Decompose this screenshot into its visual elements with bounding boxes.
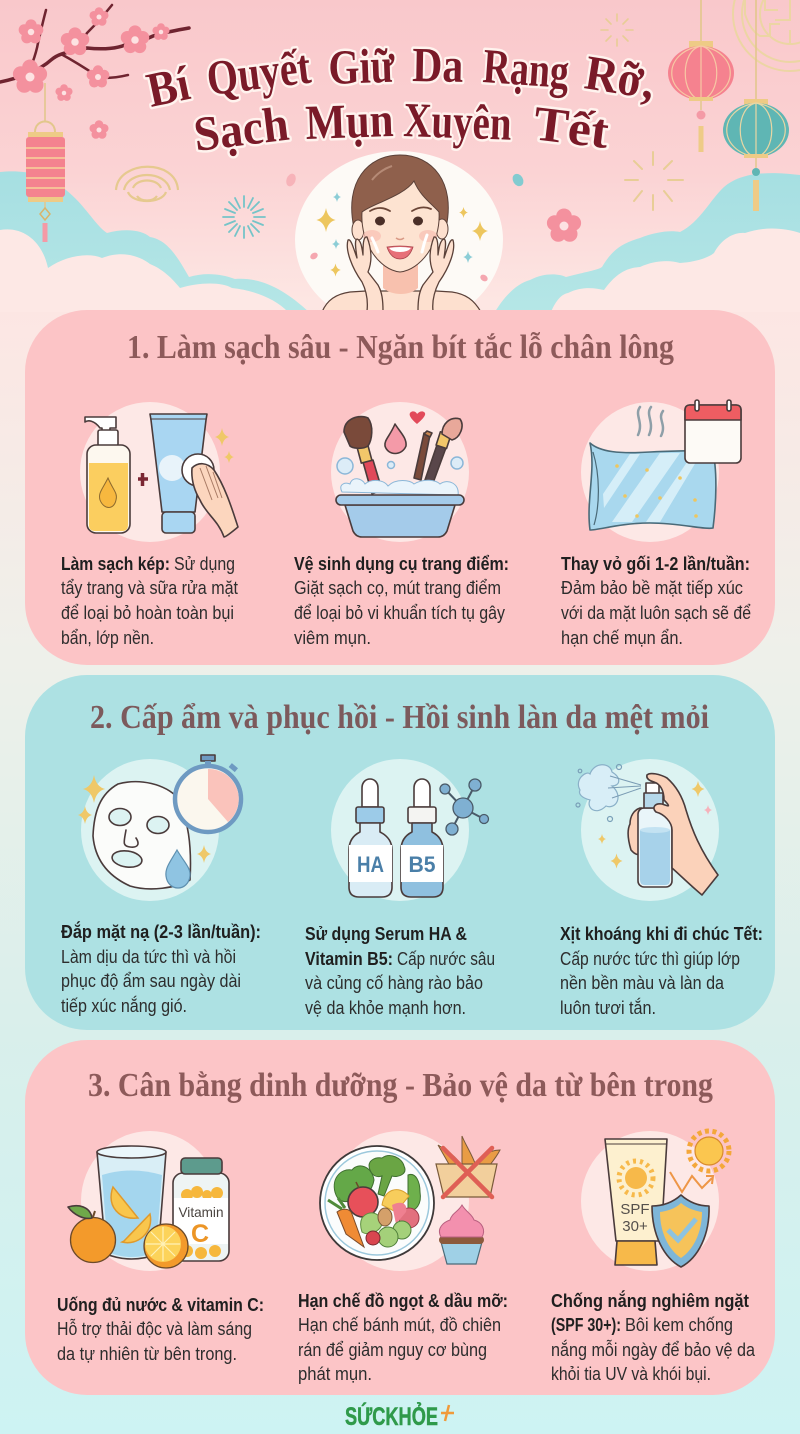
text: makeup tool hygiene: để loại bỏ vi khuẩn tích tụ gây: [294, 603, 505, 623]
teal clouds right: [495, 173, 800, 312]
heading 1: 1. Làm sạch sâu - Ngăn bít tắc lỗ chân lông: [127, 329, 674, 366]
left lantern: [26, 83, 65, 242]
text: serum: và củng cố hàng rào bảo: [305, 973, 483, 993]
cheeks: [363, 230, 437, 242]
text: serum: Cấp nước sâu: [397, 949, 495, 969]
text: sun protection: nắng mỗi ngày để bảo vệ da: [551, 1339, 756, 1360]
hair back: [352, 155, 448, 228]
smile: [387, 246, 413, 259]
icon: water, orange, vitamin C: C: [191, 1220, 209, 1248]
top gold firework: [601, 14, 633, 46]
text: double cleansing: tẩy trang và sữa rửa mặt: [61, 578, 238, 598]
title: Xuyên: [403, 92, 512, 151]
gold wave motif: [116, 167, 178, 201]
text: drink water: [57, 1295, 264, 1364]
apple: [348, 1187, 378, 1217]
teal petal: [510, 172, 526, 188]
text: mineral spray: Cấp nước tức thì giúp lớp: [560, 949, 740, 969]
icon: sunscreen, sun, shield: [581, 1131, 729, 1271]
text: limit sweets: [298, 1291, 508, 1384]
icon: sheet mask and timer: [78, 755, 241, 901]
face: [362, 181, 439, 272]
text: sheet mask: [61, 921, 261, 1016]
text: change pillowcase: hạn chế mụn ẩn.: [561, 628, 683, 648]
text: limit sweets: phát mụn.: [298, 1364, 372, 1384]
text: mineral spray: Xịt khoáng khi đi chúc Tết:: [560, 924, 763, 944]
text: change pillowcase: Đảm bảo bề mặt tiếp xúc: [561, 578, 743, 598]
panel 1: deep cleansing: [25, 310, 775, 665]
icon: serum bottles: HA: [357, 852, 384, 877]
icon: cleanser and face wash: [80, 402, 238, 542]
pink flower right: [547, 208, 581, 242]
teal lantern: [723, 0, 789, 211]
icon: sunscreen, sun, shield: SPF: [620, 1201, 650, 1218]
lemon: [382, 1190, 409, 1212]
pink lantern: [668, 0, 734, 152]
pale cloud left: [0, 229, 288, 312]
gold medallion: [733, 0, 800, 71]
text: sun protection: [551, 1290, 756, 1384]
nose: [396, 238, 404, 240]
text: serum: [305, 924, 495, 1018]
title: Mụn: [304, 92, 394, 150]
text: change pillowcase: với da mặt luôn sạch sẽ để: [561, 603, 751, 623]
pink petal: [285, 172, 297, 188]
icon: salad plate, fried food, cupcake: [320, 1131, 500, 1271]
text: sheet mask: phục độ ẩm sau ngày dài: [61, 971, 241, 991]
text: drink water: Hỗ trợ thải độc và làm sáng: [57, 1318, 252, 1339]
hand behind bottle: [628, 808, 642, 854]
text: makeup tool hygiene: [294, 554, 509, 648]
title: Quyết: [204, 39, 314, 106]
title: Rạng: [481, 38, 571, 99]
fingers over bottle: [647, 774, 718, 895]
panel 3: balanced nutrition: [25, 1040, 775, 1395]
text: makeup tool hygiene: viêm mụn.: [294, 628, 371, 648]
text: mineral spray: luôn tươi tắn.: [560, 997, 656, 1018]
text: sun protection: Bôi kem chống: [625, 1315, 733, 1335]
text: makeup tool hygiene: Giặt sạch cọ, mút trang điểm: [294, 578, 501, 598]
broccoli: [369, 1156, 405, 1196]
leafy greens: [334, 1166, 374, 1202]
text: drink water: da tự nhiên từ bên trong.: [57, 1344, 237, 1364]
teal firework: [223, 196, 265, 238]
woman portrait medallion: [295, 151, 503, 329]
text: mineral spray: [560, 924, 763, 1018]
text: change pillowcase: Thay vỏ gối 1-2 lần/tuần:: [561, 554, 750, 574]
text: sun protection: Chống nắng nghiêm ngặt: [551, 1290, 749, 1311]
text: double cleansing: Làm sạch kép:: [61, 554, 170, 574]
ears: [352, 219, 448, 240]
title: Rỡ,: [581, 45, 659, 110]
neck: [383, 262, 418, 294]
text: drink water: Uống đủ nước & vitamin C:: [57, 1295, 264, 1315]
left hand: [347, 237, 383, 311]
text: double cleansing: để loại bỏ hoàn toàn bụi: [61, 603, 234, 623]
title: [142, 37, 659, 162]
title: Bí: [142, 55, 196, 118]
heading 3: 3. Cân bằng dinh dưỡng - Bảo vệ da từ bên trong: [88, 1067, 713, 1104]
text: change pillowcase: [561, 554, 751, 648]
icon: sunscreen, sun, shield: 30+: [622, 1218, 648, 1235]
heading 2: 2. Cấp ẩm và phục hồi - Hồi sinh làn da mệt mỏi: [90, 699, 709, 736]
right hand: [418, 237, 454, 311]
text: double cleansing: [61, 554, 238, 648]
pale cloud right: [551, 228, 800, 312]
right gold firework: [625, 152, 683, 210]
blossom branch: [0, 5, 189, 101]
radish: [399, 1208, 419, 1228]
teal clouds left: [0, 171, 309, 312]
text: serum: Sử dụng Serum HA &: [305, 924, 467, 944]
hair highlight: [372, 166, 392, 180]
carrot: [337, 1209, 364, 1247]
panel 2: hydration and repair: [25, 675, 775, 1030]
icon: water, orange, vitamin C: [68, 1131, 229, 1271]
lettuce: [360, 1213, 382, 1234]
text: serum: vệ da khỏe mạnh hơn.: [305, 998, 466, 1018]
text: sheet mask: tiếp xúc nắng gió.: [61, 995, 187, 1016]
text: double cleansing: bẩn, lớp nền.: [61, 628, 154, 648]
title: Sạch: [191, 96, 292, 162]
icon: serum bottles: B5: [408, 852, 436, 877]
sparkles: [316, 207, 488, 276]
icon: serum bottles: [331, 759, 488, 901]
text: mineral spray: nền bền màu và làn da: [560, 973, 725, 993]
shoulders: [322, 291, 481, 312]
text: serum: Vitamin B5:: [305, 949, 393, 969]
text: sun protection: (SPF 30+):: [551, 1315, 621, 1335]
logo: SỨCKHỎE: [345, 1401, 438, 1431]
small blossom: [90, 120, 108, 139]
icon: pillow and calendar: [581, 400, 741, 542]
cucumbers: [393, 1221, 411, 1239]
title: Da: [412, 37, 464, 93]
text: sun protection: khỏi tia UV và khói bụi.: [551, 1364, 711, 1384]
text: limit sweets: Hạn chế bánh mút, đồ chiên: [298, 1315, 501, 1335]
title: Tết: [531, 95, 613, 159]
eyebrows: [370, 207, 431, 211]
text: limit sweets: Hạn chế đồ ngọt & dầu mỡ:: [298, 1291, 508, 1311]
tomato: [366, 1231, 380, 1245]
text: double cleansing: Sử dụng: [174, 554, 235, 574]
icon: makeup tools in basin: [331, 402, 469, 542]
header decoration: [0, 0, 800, 312]
fried food basket: [436, 1136, 500, 1197]
text: limit sweets: rán để giảm nguy cơ bùng: [298, 1340, 487, 1360]
cupcake: [439, 1205, 484, 1264]
text: sheet mask: Đắp mặt nạ (2-3 lần/tuần):: [61, 921, 261, 942]
petals: [309, 251, 489, 283]
cream streaks: [372, 235, 427, 252]
text: makeup tool hygiene: Vệ sinh dụng cụ trang điểm:: [294, 554, 509, 574]
title: Giữ: [327, 38, 396, 95]
icon: mineral spray: [576, 759, 719, 901]
almond: [378, 1208, 392, 1226]
eyes: [375, 216, 423, 226]
text: sheet mask: Làm dịu da tức thì và hồi: [61, 947, 236, 967]
icon: water, orange, vitamin C: Vitamin: [178, 1204, 224, 1220]
